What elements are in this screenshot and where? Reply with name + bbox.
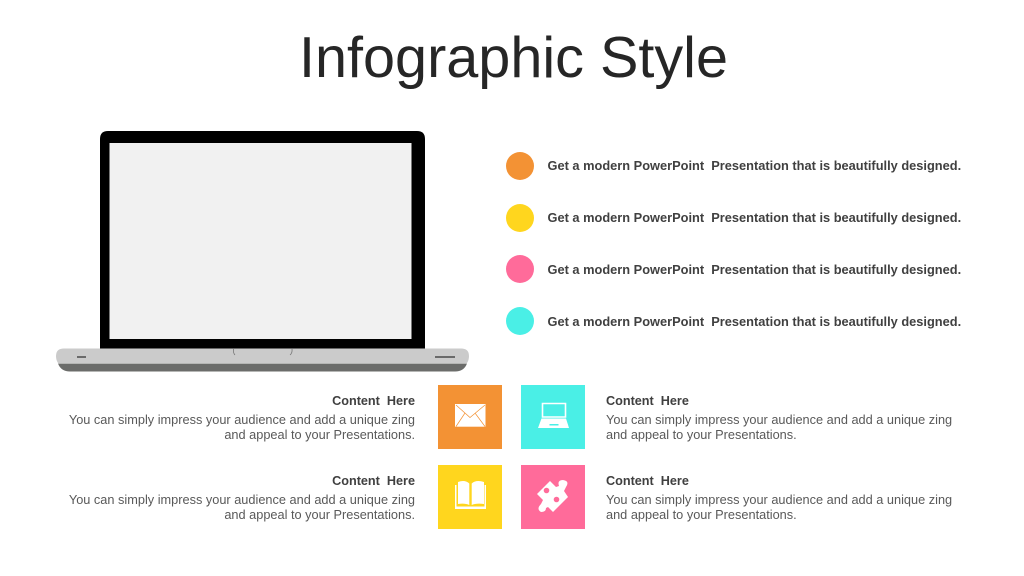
text block: bottom left: and appeal to your Presentations. xyxy=(224,507,415,522)
text block: bottom right: Content Here xyxy=(606,474,689,488)
text block: bottom left: You can simply impress your audience and add a unique zing xyxy=(69,492,415,507)
text block: top left: You can simply impress your audience and add a unique zing xyxy=(69,412,415,427)
bullet 3 xyxy=(506,255,961,283)
text block: bottom left xyxy=(69,474,415,522)
text: Get a modern PowerPoint Presentation that is beautifully designed. xyxy=(548,158,961,173)
text block: bottom left: Content Here xyxy=(332,474,415,488)
icon: laptop xyxy=(521,385,585,449)
text block: bottom right: and appeal to your Presentations. xyxy=(606,507,797,522)
icon: envelope xyxy=(438,385,502,449)
text block: top left xyxy=(69,394,415,442)
text block: top right xyxy=(606,394,952,442)
text: Get a modern PowerPoint Presentation that is beautifully designed. xyxy=(548,210,961,225)
icon: open book xyxy=(438,465,502,529)
text block: top left: Content Here xyxy=(332,394,415,408)
text block: top right: You can simply impress your audience and add a unique zing xyxy=(606,412,952,427)
text block: bottom right xyxy=(606,474,952,522)
text: Get a modern PowerPoint Presentation that is beautifully designed. xyxy=(548,262,961,277)
text block: top right: and appeal to your Presentations. xyxy=(606,427,797,442)
text block: bottom right: You can simply impress your audience and add a unique zing xyxy=(606,492,952,507)
bullet 2 xyxy=(506,204,961,232)
text block: top right: Content Here xyxy=(606,394,689,408)
bullet 4 xyxy=(506,307,961,335)
icon: puzzle piece xyxy=(521,465,585,529)
text: Get a modern PowerPoint Presentation that is beautifully designed. xyxy=(548,314,961,329)
bullet 1 xyxy=(506,152,961,180)
text block: top left: and appeal to your Presentations. xyxy=(224,427,415,442)
title: Infographic Style xyxy=(299,26,728,90)
laptop illustration xyxy=(56,131,469,372)
